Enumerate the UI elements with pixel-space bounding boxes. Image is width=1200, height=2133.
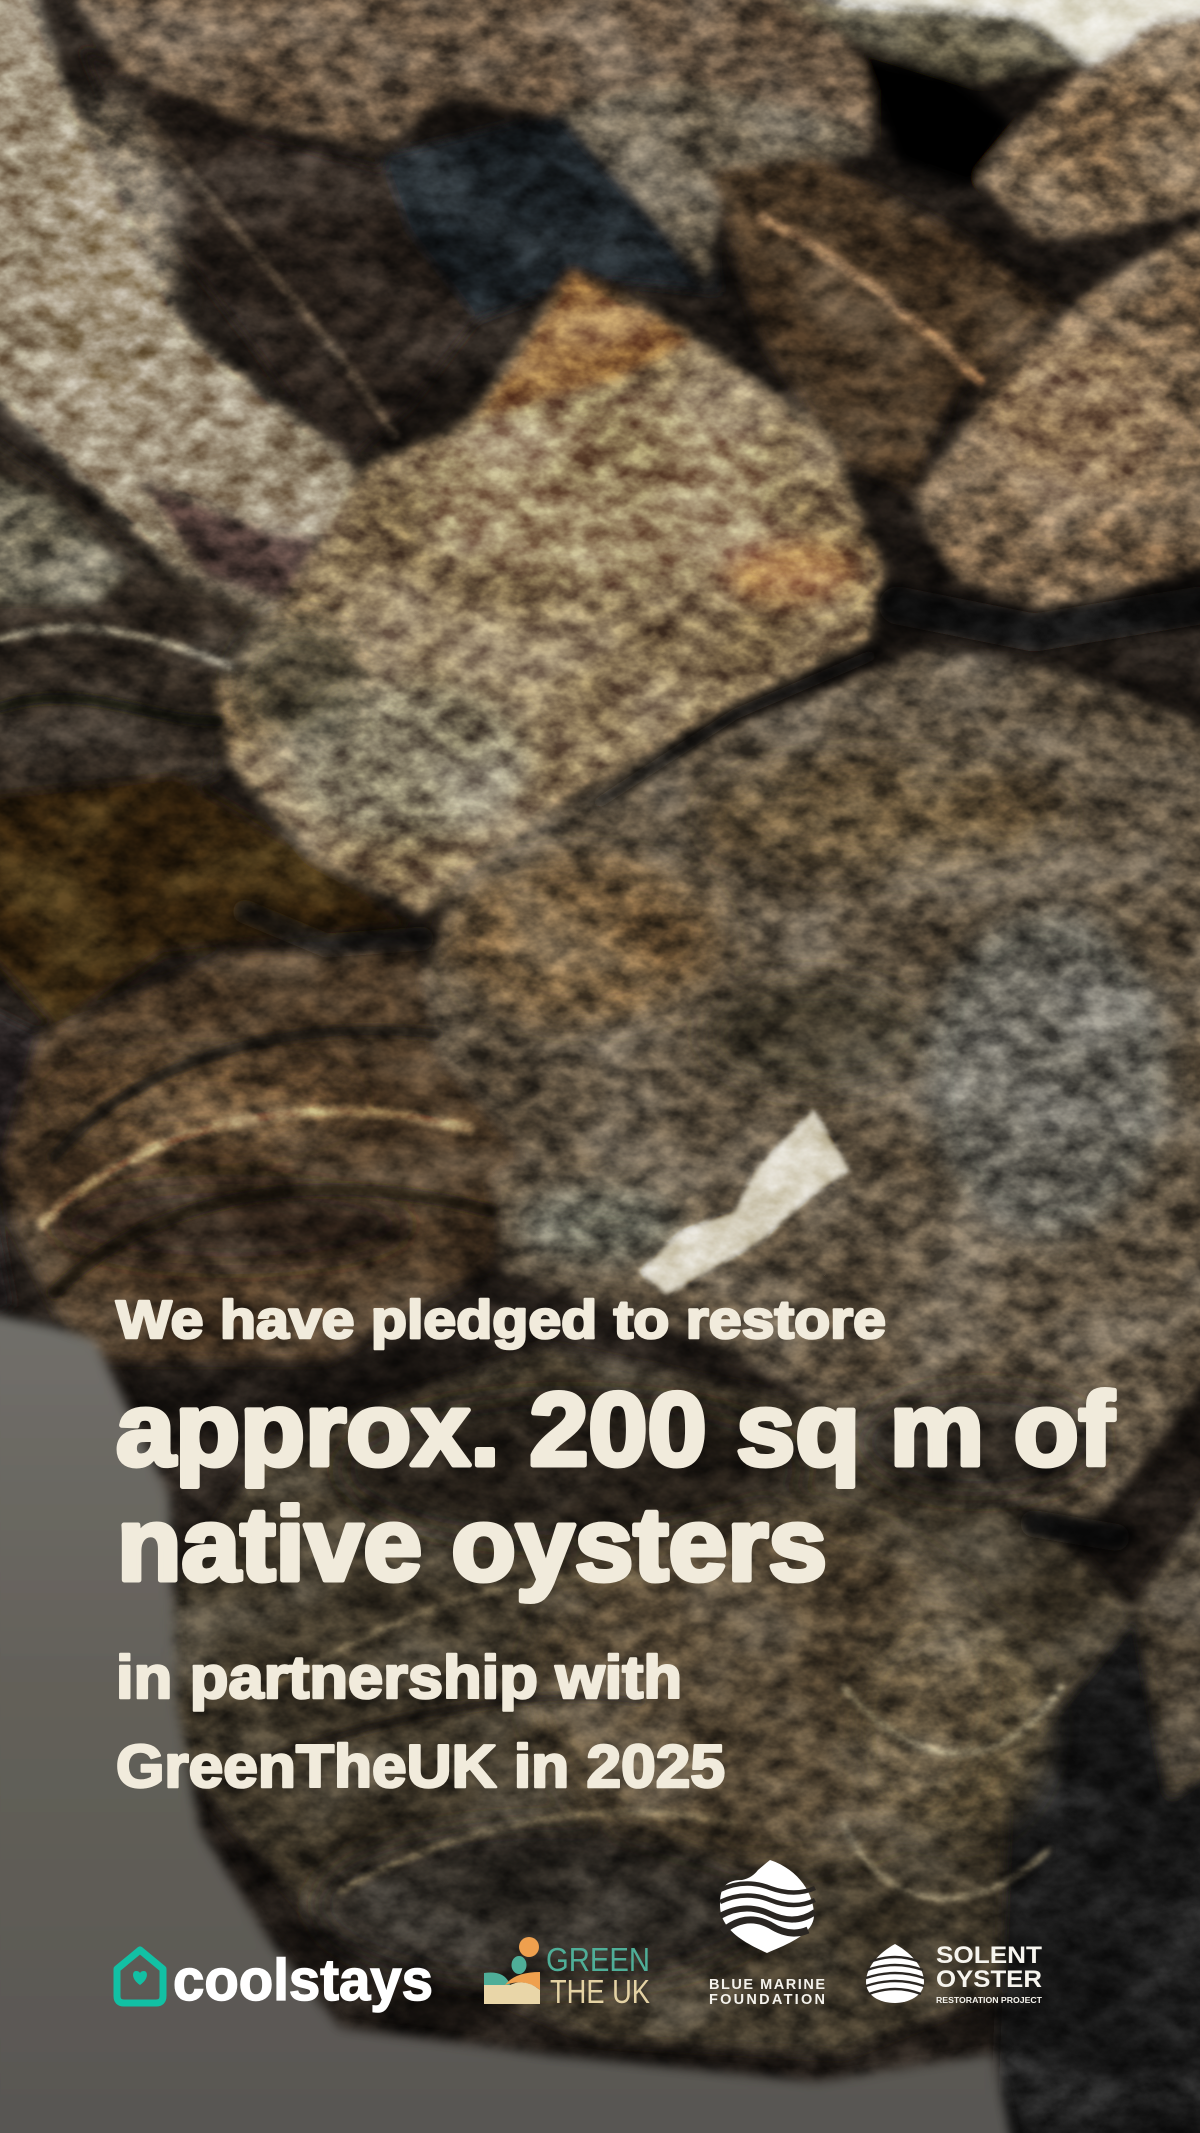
- line: GreenTheUK in 2025: GreenTheUK in 2025: [116, 1733, 725, 1800]
- logo row: [117, 1860, 1042, 2013]
- grey tray surface: [0, 1313, 1014, 2133]
- shell growth ridges: [0, 122, 1061, 1898]
- logo: Solent Oyster Restoration Project: [866, 1942, 1042, 2005]
- line: approx. 200 sq m of: approx. 200 sq m of: [116, 1372, 1114, 1488]
- heading text block: [116, 1290, 1114, 1800]
- logo: Blue Marine Foundation: FOUNDATION: [709, 1992, 825, 2008]
- dark crevices between shells: [245, 605, 1200, 1537]
- white patch on large shell: [639, 1109, 850, 1295]
- line: pledge intro: We have pledged to restore: [116, 1290, 886, 1350]
- logo: Green The UK: THE UK: [550, 1973, 650, 2010]
- logo: Solent Oyster Restoration Project: OYSTER: [936, 1966, 1042, 1993]
- logo: Green The UK: GREEN: [546, 1941, 650, 1978]
- logo: coolstays: coolstays: [173, 1948, 433, 2013]
- logo: Solent Oyster Restoration Project: RESTORATION PROJECT: [936, 1996, 1042, 2005]
- logo: Blue Marine Foundation: BLUE MARINE: [709, 1977, 825, 1993]
- line: native oysters: native oysters: [117, 1487, 827, 1603]
- line: in partnership with: in partnership with: [116, 1644, 682, 1711]
- logo: Blue Marine Foundation: [709, 1860, 825, 2008]
- logo: Green The UK: [484, 1937, 650, 2010]
- logo: Solent Oyster Restoration Project: SOLENT: [936, 1942, 1042, 1969]
